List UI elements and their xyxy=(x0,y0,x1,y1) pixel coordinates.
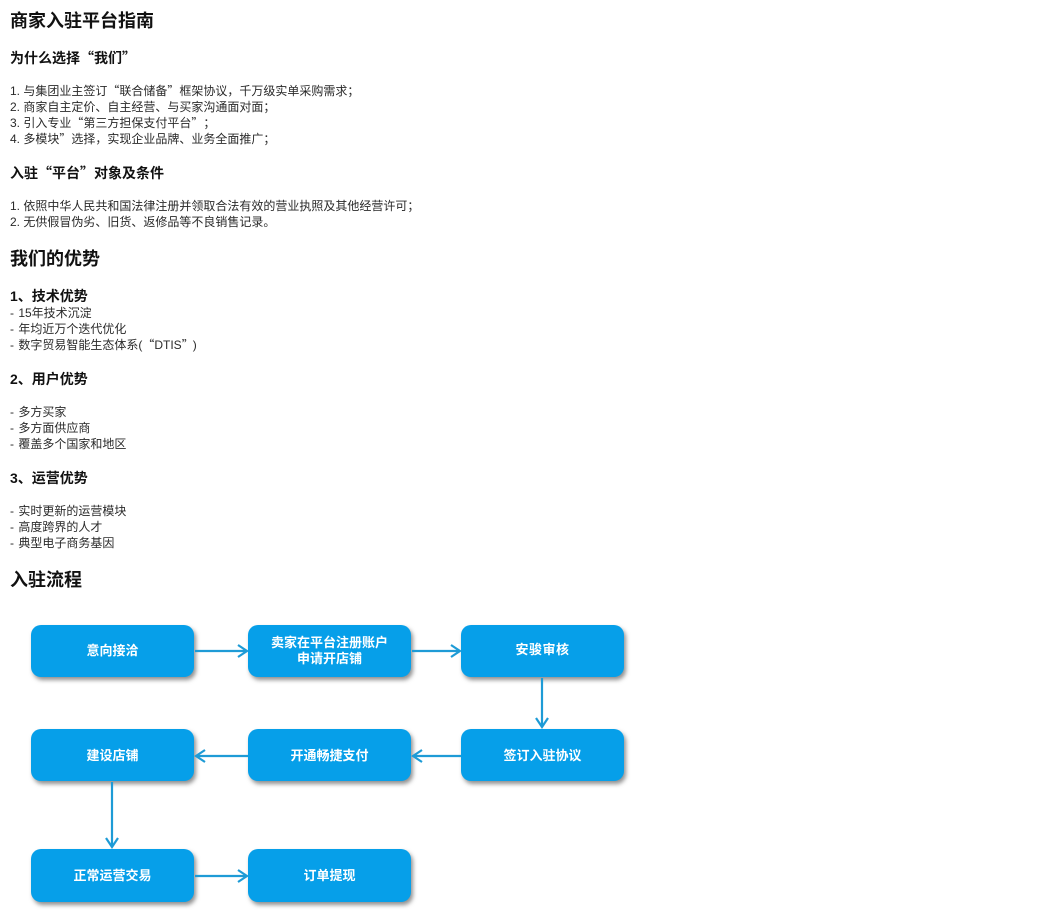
step: initial contact: 意向接洽 xyxy=(86,643,138,658)
step: verification: 安骏审核 xyxy=(515,642,570,656)
heading: our advantages: 我们的优势 xyxy=(10,249,100,269)
text block: tech advantage: - 年均近万个迭代优化 xyxy=(10,322,126,336)
text block: conditions xyxy=(10,199,419,229)
text block: operations advantage: - 实时更新的运营模块 xyxy=(10,504,126,518)
step: build store xyxy=(31,729,194,781)
flowchart: onboarding process xyxy=(30,625,629,908)
step: initial contact xyxy=(31,625,194,677)
text block: operations advantage xyxy=(10,504,126,550)
text block: reasons: 4. 多模块”选择，实现企业品牌、业务全面推广； xyxy=(10,130,275,147)
text block: tech advantage: - 数字贸易智能生态体系(“DTIS”) xyxy=(10,336,197,353)
title: 商家入驻平台指南 xyxy=(10,11,154,31)
step: sign agreement: 签订入驻协议 xyxy=(503,748,582,763)
step: normal operation xyxy=(31,849,194,902)
step: open payment xyxy=(248,729,411,781)
heading: operations advantage: 3、运营优势 xyxy=(10,470,88,486)
heading: onboarding process: 入驻流程 xyxy=(10,570,82,590)
heading: why choose us: 为什么选择“我们” xyxy=(10,48,136,68)
text block: conditions: 1. 依照中华人民共和国法律注册并领取合法有效的营业执照及其他经营许可； xyxy=(10,199,419,213)
step: register account: 卖家在平台注册账户 xyxy=(271,635,388,650)
text block: reasons: 1. 与集团业主签订“联合储备”框架协议，千万级实单采购需求； xyxy=(10,82,359,99)
text block: user advantage: - 多方面供应商 xyxy=(10,421,90,435)
text block: operations advantage: - 典型电子商务基因 xyxy=(10,536,114,550)
text block: user advantage: - 覆盖多个国家和地区 xyxy=(10,437,126,451)
text block: reasons: 3. 引入专业“第三方担保支付平台”； xyxy=(10,114,215,131)
text block: operations advantage: - 高度跨界的人才 xyxy=(10,520,102,534)
text block: user advantage: - 多方买家 xyxy=(10,405,66,419)
step: order withdrawal: 订单提现 xyxy=(303,868,356,883)
step: sign agreement xyxy=(461,729,624,781)
text block: reasons xyxy=(10,82,359,147)
text block: reasons: 2. 商家自主定价、自主经营、与买家沟通面对面； xyxy=(10,100,275,114)
text block: conditions: 2. 无供假冒伪劣、旧货、返修品等不良销售记录。 xyxy=(10,215,275,229)
step: register account: 申请开店铺 xyxy=(297,651,362,666)
heading: user advantage: 2、用户优势 xyxy=(10,371,88,387)
text block: tech advantage: - 15年技术沉淀 xyxy=(10,306,92,320)
step: register account xyxy=(248,625,411,677)
arrows xyxy=(105,644,549,883)
heading: platform conditions: 入驻“平台”对象及条件 xyxy=(10,163,164,183)
step: order withdrawal xyxy=(248,849,411,902)
text block: user advantage xyxy=(10,405,126,451)
heading: tech advantage: 1、技术优势 xyxy=(10,288,88,304)
step: verification xyxy=(461,625,624,677)
text block: tech advantage xyxy=(10,306,197,353)
step: open payment: 开通畅捷支付 xyxy=(290,748,368,763)
step: build store: 建设店铺 xyxy=(86,748,138,763)
step: normal operation: 正常运营交易 xyxy=(73,868,152,883)
